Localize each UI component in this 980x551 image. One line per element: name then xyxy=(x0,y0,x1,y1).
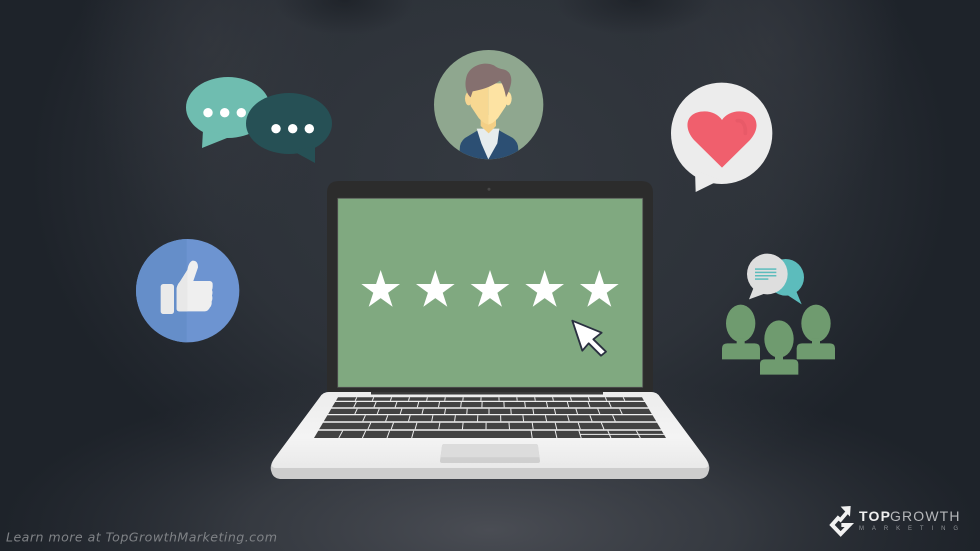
icon: group discussion xyxy=(722,254,835,375)
icon: chat bubbles xyxy=(186,77,332,163)
logo: Top Growth Marketing xyxy=(832,506,960,534)
logo wordmark: GROWTH xyxy=(890,508,960,524)
laptop screen xyxy=(338,198,643,387)
five stars rating xyxy=(361,270,619,307)
cursor arrow xyxy=(572,321,606,356)
icon: right person xyxy=(797,305,835,359)
logo wordmark: TOP xyxy=(859,508,890,524)
webcam xyxy=(488,188,490,191)
laptop lid xyxy=(327,181,653,392)
logo wordmark xyxy=(859,508,960,532)
icon: heart speech bubble xyxy=(671,83,772,192)
footer: learn more text: Learn more at TopGrowthMarketing.com xyxy=(6,530,277,544)
logo wordmark: MARKETING xyxy=(859,526,958,532)
keyboard xyxy=(314,397,666,438)
icon: light chat bubble xyxy=(186,77,270,148)
laptop xyxy=(271,181,709,479)
trackpad xyxy=(440,444,540,463)
icon: teal speech bubble xyxy=(767,259,804,304)
icon: person avatar xyxy=(434,50,543,163)
icon: dark chat bubble xyxy=(246,93,332,163)
icon: left person xyxy=(722,305,760,359)
icon: white speech bubble xyxy=(747,254,788,299)
laptop base xyxy=(271,392,709,479)
logo mark xyxy=(832,506,851,534)
icon: centre person xyxy=(760,320,798,375)
icon: thumbs up xyxy=(136,239,239,343)
